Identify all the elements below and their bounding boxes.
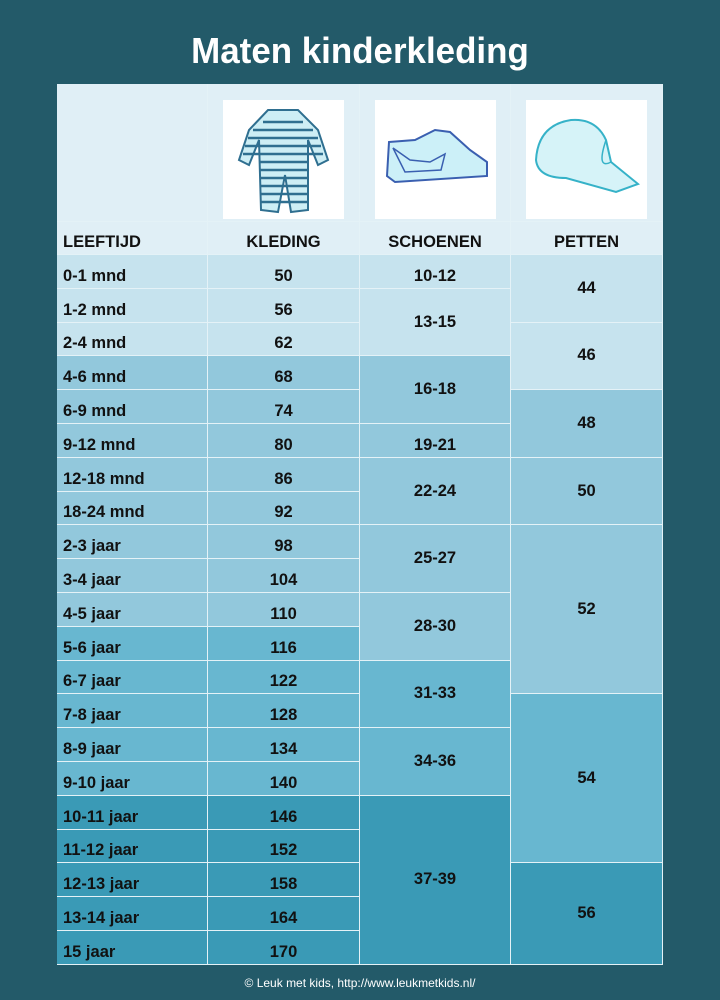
size table: 50	[274, 267, 293, 285]
size table: 50	[577, 482, 596, 500]
size table: 170	[270, 943, 297, 961]
size table: 12-18 mnd	[63, 470, 145, 488]
size table: 152	[270, 841, 297, 859]
size table: SCHOENEN	[388, 233, 482, 251]
size table: 74	[274, 402, 293, 420]
size table: 164	[270, 909, 297, 927]
size table: 18-24 mnd	[63, 503, 145, 521]
header empty cell	[57, 84, 208, 222]
size table: 8-9 jaar	[63, 740, 121, 758]
size table: 16-18	[414, 380, 456, 398]
size table: 7-8 jaar	[63, 706, 121, 724]
size table: 2-3 jaar	[63, 537, 121, 555]
size table: 140	[270, 774, 297, 792]
size table: 34-36	[414, 752, 456, 770]
size table: 98	[274, 537, 293, 555]
icon: baby clothing	[208, 84, 360, 222]
footer credit: © Leuk met kids, http://www.leukmetkids.nl/	[245, 976, 475, 990]
size table: 134	[270, 740, 297, 758]
size table: 31-33	[414, 684, 456, 702]
size table: 56	[274, 301, 293, 319]
size table: 52	[577, 600, 596, 618]
size table: 12-13 jaar	[63, 875, 139, 893]
size table: 122	[270, 672, 297, 690]
size table: 22-24	[414, 482, 456, 500]
size table: 15 jaar	[63, 943, 115, 961]
size table	[57, 84, 663, 965]
size table: 68	[274, 368, 293, 386]
size table: 104	[270, 571, 297, 589]
header labels: LEEFTIJD	[63, 233, 141, 251]
size table: 37-39	[414, 870, 456, 888]
size table: 92	[274, 503, 293, 521]
size table: 19-21	[414, 436, 456, 454]
cap sizes	[511, 255, 663, 323]
icon: shoe	[360, 84, 511, 222]
size table: PETTEN	[554, 233, 619, 251]
cap sizes: 44	[577, 279, 596, 297]
size table: 28-30	[414, 617, 456, 635]
shoe sizes: 10-12	[414, 267, 456, 285]
size table: 146	[270, 808, 297, 826]
size table: 128	[270, 706, 297, 724]
size table: 5-6 jaar	[63, 639, 121, 657]
size table: 80	[274, 436, 293, 454]
size table: 48	[577, 414, 596, 432]
size table: 158	[270, 875, 297, 893]
size table: 10-11 jaar	[63, 808, 138, 826]
size table: 13-15	[414, 313, 456, 331]
size table: 6-7 jaar	[63, 672, 121, 690]
size table: 6-9 mnd	[63, 402, 126, 420]
size table: 116	[270, 639, 297, 657]
size table: 4-6 mnd	[63, 368, 126, 386]
size table: 54	[577, 769, 596, 787]
header labels	[57, 222, 208, 255]
size table: 9-10 jaar	[63, 774, 130, 792]
size table: 62	[274, 334, 293, 352]
size table: KLEDING	[246, 233, 321, 251]
shoe sizes	[360, 255, 511, 289]
title: Maten kinderkleding	[191, 30, 529, 71]
size table: 11-12 jaar	[63, 841, 138, 859]
icon: cap	[511, 84, 663, 222]
size table: 13-14 jaar	[63, 909, 139, 927]
size table: 86	[274, 470, 293, 488]
size table: 56	[577, 904, 596, 922]
size table: 4-5 jaar	[63, 605, 121, 623]
size table: 9-12 mnd	[63, 436, 135, 454]
age & clothing rows: 0-1 mnd	[63, 267, 126, 285]
age & clothing rows	[57, 255, 208, 289]
size table: 1-2 mnd	[63, 301, 126, 319]
size table: 25-27	[414, 549, 456, 567]
size table: 2-4 mnd	[63, 334, 126, 352]
size table: 3-4 jaar	[63, 571, 121, 589]
size table: 46	[577, 346, 596, 364]
size table: 110	[270, 605, 297, 623]
